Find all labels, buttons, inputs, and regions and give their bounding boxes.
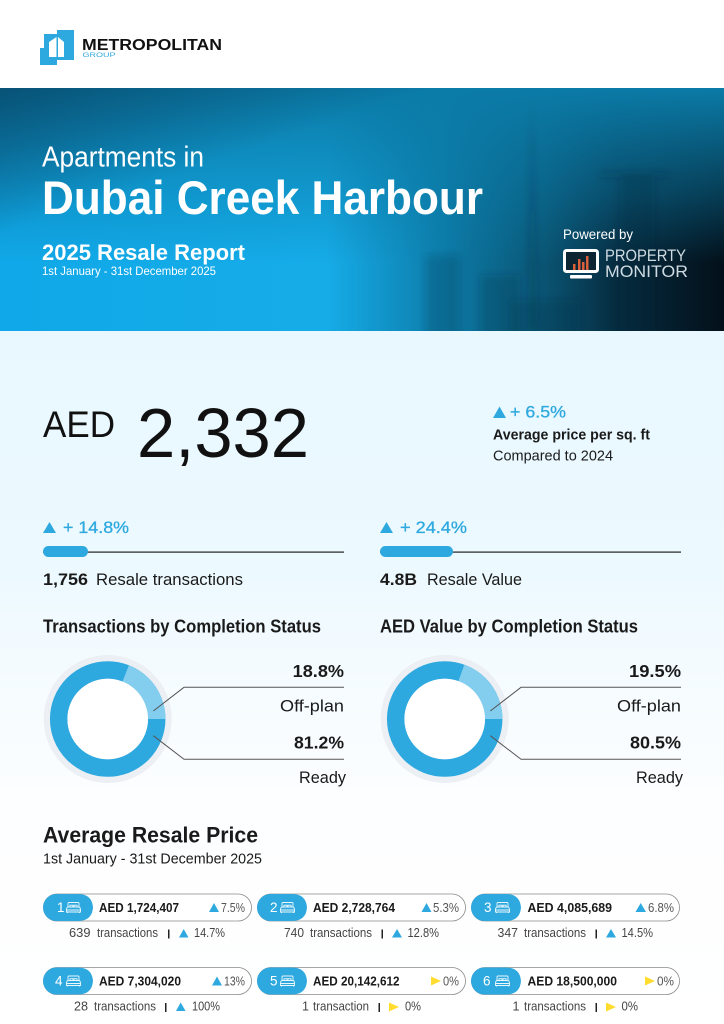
banner heading <box>42 142 483 224</box>
stat: resale transactions <box>43 518 344 589</box>
page background <box>0 331 724 1024</box>
price card: 3 bedrooms: 3 <box>484 900 492 915</box>
price change callout: Compared to 2024 <box>493 448 613 464</box>
price card: 5 bedrooms: transaction <box>313 1000 369 1014</box>
stat: resale transactions: + 14.8% <box>63 518 129 537</box>
price card: 1 bedroom: transactions <box>97 926 158 940</box>
price card: 1 bedroom: 7.5% <box>221 901 245 915</box>
price card: 1 bedroom: 639 <box>69 926 91 940</box>
price card: 5 bedrooms: 0% <box>405 1000 421 1014</box>
logo: Metropolitan Group: METROPOLITAN <box>82 37 222 54</box>
price card: 2 bedrooms: 12.8% <box>408 926 439 940</box>
stat: resale value: Resale Value <box>427 570 522 589</box>
logo: Metropolitan Group <box>40 30 222 65</box>
price card: 1 bedroom: AED 1,724,407 <box>99 901 179 915</box>
price card: 2 bedrooms: 2 <box>270 900 278 915</box>
donut chart: transactions <box>44 655 346 787</box>
price card: 6 bedrooms: 0% <box>622 1000 638 1014</box>
price card: 5 bedrooms <box>257 968 466 1014</box>
price card: 5 bedrooms: AED 20,142,612 <box>313 974 400 988</box>
price card: 2 bedrooms: AED 2,728,764 <box>313 901 395 915</box>
price change callout: + 6.5% <box>510 403 566 422</box>
price card: 4 bedrooms: transactions <box>94 1000 156 1014</box>
donut chart: AED value: Ready <box>636 768 683 787</box>
stat: resale transactions: 1,756 <box>43 570 88 589</box>
donut chart: AED value: 19.5% <box>629 661 681 681</box>
heading: average resale price <box>43 822 262 868</box>
price card: 3 bedrooms: 14.5% <box>622 926 653 940</box>
price card: 5 bedrooms: 5 <box>270 974 278 988</box>
price card: 1 bedroom: 1 <box>57 900 65 915</box>
donut chart: AED value: Off-plan <box>617 696 681 716</box>
report title and date <box>42 240 245 278</box>
powered by Property Monitor <box>563 226 688 281</box>
price card: 3 bedrooms <box>471 894 680 940</box>
powered by Property Monitor: MONITOR <box>605 263 688 281</box>
heading: average resale price: 1st January - 31st December 2025 <box>43 852 262 868</box>
powered by Property Monitor: PROPERTY <box>605 247 686 265</box>
price card: 4 bedrooms: 28 <box>74 1000 88 1014</box>
banner heading: Dubai Creek Harbour <box>42 171 483 224</box>
stat: resale transactions: Resale transactions <box>96 570 243 589</box>
price card: 4 bedrooms: AED 7,304,020 <box>99 974 181 988</box>
price card: 3 bedrooms: 347 <box>498 926 518 940</box>
price card: 3 bedrooms: transactions <box>524 926 586 940</box>
price card: 3 bedrooms: 6.8% <box>648 901 674 915</box>
price card: 6 bedrooms: AED 18,500,000 <box>528 974 617 988</box>
heading: average resale price: Average Resale Price <box>43 822 258 848</box>
price card: 2 bedrooms: 5.3% <box>433 901 459 915</box>
powered by Property Monitor: Powered by <box>563 226 633 242</box>
price card: 5 bedrooms: 0% <box>443 974 459 988</box>
price card: 6 bedrooms: 6 <box>483 974 491 988</box>
banner heading: Apartments in <box>42 142 204 174</box>
donut chart: transactions: 18.8% <box>293 661 344 681</box>
report title and date: 2025 Resale Report <box>42 240 245 265</box>
donut chart: AED value: 80.5% <box>630 732 681 752</box>
price card: 6 bedrooms <box>471 968 680 1014</box>
price card: 2 bedrooms <box>257 894 466 940</box>
price card: 6 bedrooms: 1 <box>512 1000 520 1014</box>
stat: resale value: 4.8B <box>380 570 417 589</box>
price card: 5 bedrooms: 1 <box>302 1000 309 1014</box>
report title and date: 1st January - 31st December 2025 <box>42 264 216 278</box>
heading: transactions by completion status: Transactions by Completion Status <box>43 616 321 636</box>
donut chart: transactions: Off-plan <box>280 696 344 716</box>
price card: 4 bedrooms: 4 <box>55 974 63 988</box>
price card: 4 bedrooms: 13% <box>224 974 245 988</box>
heading: AED value by completion status: AED Value by Completion Status <box>380 616 638 636</box>
stat: resale value: + 24.4% <box>400 518 467 537</box>
headline price: AED <box>43 404 115 445</box>
donut chart: AED value <box>381 655 683 787</box>
donut chart: transactions: 81.2% <box>294 732 344 752</box>
price card: 1 bedroom: 14.7% <box>194 926 225 940</box>
header banner <box>0 88 724 345</box>
price change callout <box>493 403 650 464</box>
price card: 6 bedrooms: 0% <box>657 974 674 988</box>
headline price <box>43 394 309 472</box>
price card: 6 bedrooms: transactions <box>524 1000 586 1014</box>
logo: Metropolitan Group: GROUP <box>82 52 116 59</box>
price card: 3 bedrooms: AED 4,085,689 <box>528 901 612 915</box>
donut chart: transactions: Ready <box>299 768 346 787</box>
headline price: 2,332 <box>137 394 309 472</box>
stat: resale value <box>380 518 681 589</box>
price card: 2 bedrooms: 740 <box>284 926 304 940</box>
price card: 4 bedrooms <box>43 968 252 1014</box>
price card: 2 bedrooms: transactions <box>310 926 372 940</box>
price card: 1 bedroom <box>43 894 252 940</box>
price card: 4 bedrooms: 100% <box>192 1000 220 1014</box>
price change callout: Average price per sq. ft <box>493 426 650 444</box>
